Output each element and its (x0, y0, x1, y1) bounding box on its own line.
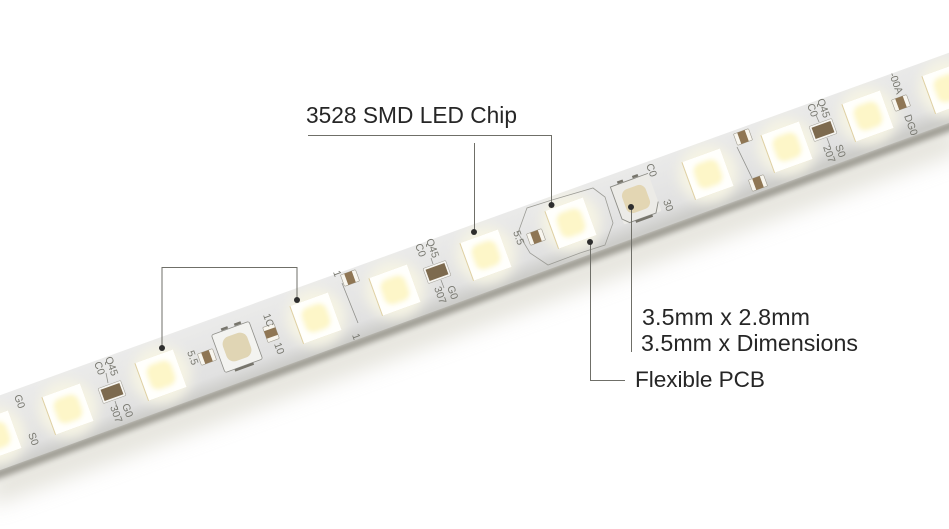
printed silkscreen labels: C0 (643, 162, 659, 179)
LED chip 0 (0, 410, 22, 462)
printed silkscreen labels: 5.5 (510, 229, 527, 247)
printed silkscreen labels: S0 (25, 431, 41, 447)
printed silkscreen labels: 307 (431, 285, 449, 306)
callout lines (162, 136, 632, 380)
label: flexible PCB: Flexible PCB (635, 367, 765, 392)
LED chip 9 (841, 90, 894, 142)
small resistor 3 (340, 270, 360, 286)
LED chip 8 (760, 121, 813, 173)
SMD components (98, 95, 911, 404)
printed silkscreen labels: G0 (444, 284, 460, 301)
callout dots (159, 202, 634, 351)
printed silkscreen labels: 1 (349, 332, 363, 342)
LED chip 5 (459, 229, 512, 281)
LED chip 10 (921, 62, 949, 114)
LED chip 4 (368, 264, 421, 316)
printed silkscreen labels: 1 (330, 269, 344, 279)
small resistor 4 (526, 229, 546, 245)
label: dimensions: 3.5mm x 2.8mm (642, 304, 810, 330)
printed silkscreen labels: Q45 (423, 237, 441, 260)
circuit outline around chip (518, 188, 613, 265)
printed silkscreen labels: S0 (832, 143, 848, 159)
printed silkscreen labels: 5.5 (184, 349, 201, 367)
LED chip 7 (681, 148, 734, 200)
printed silkscreen labels: 307 (107, 404, 125, 425)
leader: chip label to LED (308, 136, 552, 205)
printed silkscreen labels: C0 (91, 360, 107, 377)
small resistor 1 (197, 349, 217, 365)
exposed chip left (210, 319, 263, 375)
strip shadow (0, 118, 949, 506)
small resistor 6 (748, 175, 768, 191)
label: dimensions: 3.5mm x Dimensions (641, 330, 858, 356)
traces (106, 115, 830, 410)
LED chips row (0, 62, 949, 462)
LED chip 6 (544, 197, 597, 249)
printed silkscreen labels: -00A (886, 71, 905, 96)
printed silkscreen labels: G0 (11, 393, 27, 410)
warm LED glow on strip (0, 59, 949, 465)
printed silkscreen labels: 10 (271, 341, 287, 356)
small resistor 5 (733, 129, 753, 145)
printed silkscreen labels: C0 (804, 102, 820, 119)
printed silkscreen labels: 1C (260, 312, 276, 329)
printed silkscreen labels (11, 71, 920, 447)
large resistor 2 (423, 260, 451, 284)
small resistor 7 (891, 95, 911, 111)
printed silkscreen labels: 30 (660, 198, 676, 213)
large resistor 3 (809, 118, 837, 142)
label: dimensions (641, 304, 858, 356)
large resistor 1 (98, 380, 126, 404)
printed silkscreen labels: G0 (119, 402, 135, 419)
leader: chip second LED (474, 143, 476, 232)
label: chip type: 3528 SMD LED Chip (306, 102, 517, 128)
flexible PCB strip (0, 51, 949, 472)
LED chip 1 (41, 383, 94, 435)
printed silkscreen labels: Q45 (814, 97, 832, 120)
LED chip 2 (134, 349, 187, 401)
printed silkscreen labels: 207 (820, 144, 838, 165)
leader: bracket between chips (162, 268, 297, 348)
printed silkscreen labels: Q45 (102, 355, 120, 378)
printed silkscreen labels: C0 (412, 242, 428, 259)
leader: flexible PCB (590, 242, 625, 380)
exposed chip right (609, 171, 662, 227)
LED chip 3 (289, 292, 342, 344)
small resistor 2 (263, 323, 279, 343)
printed silkscreen labels: DG0 (901, 113, 920, 137)
leader: dimensions (630, 207, 632, 352)
